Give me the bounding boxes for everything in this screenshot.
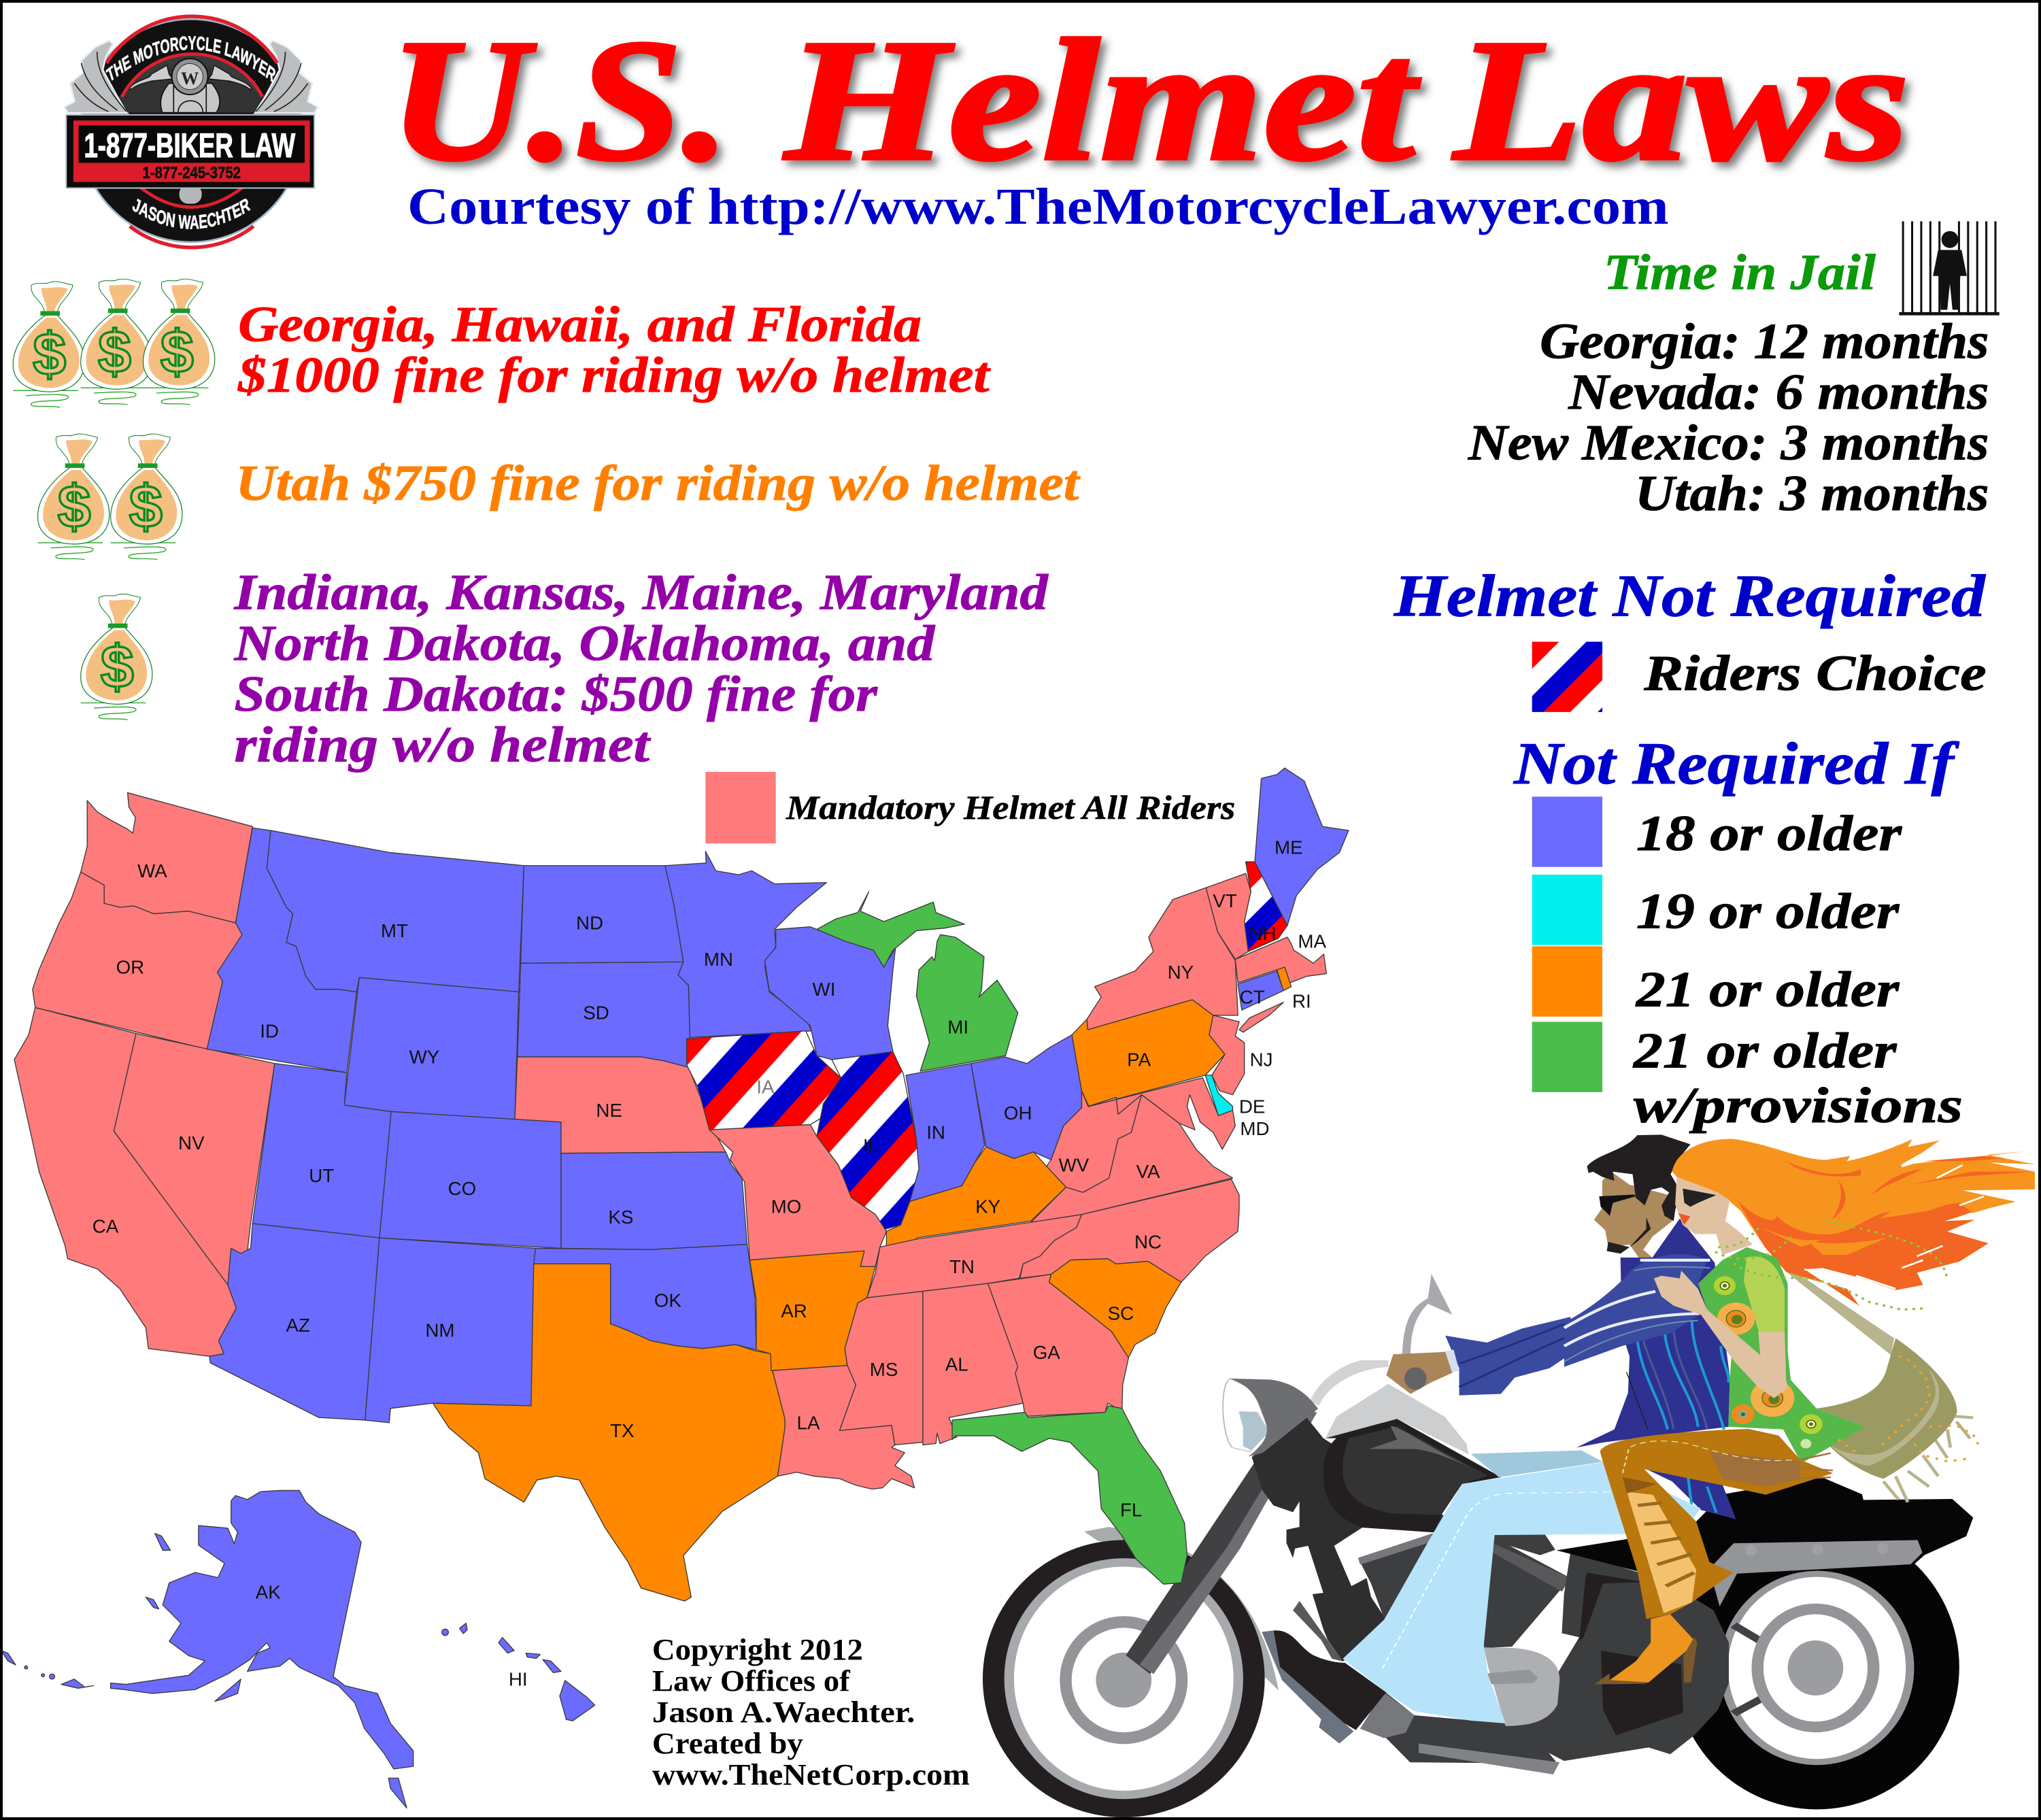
map state labels: WA — [137, 860, 167, 881]
map state labels: MA — [1298, 930, 1327, 951]
icon: one money bag: $ — [101, 633, 134, 701]
icon: one money bag — [81, 594, 152, 720]
map state labels: VA — [1136, 1161, 1160, 1182]
map state labels: CA — [92, 1215, 119, 1236]
map state labels: ND — [576, 913, 603, 934]
map state labels: NC — [1134, 1231, 1162, 1252]
legend: 21 or older with provisions: w/provisions — [1634, 1077, 1963, 1134]
map state labels: MD — [1240, 1118, 1270, 1139]
map state labels: MO — [771, 1196, 801, 1217]
jail time list — [1468, 313, 1989, 522]
copyright: Law Offices of — [652, 1664, 851, 1698]
legend: 19 or older — [1532, 875, 1900, 945]
copyright: Jason A.Waechter. — [652, 1696, 915, 1729]
fine text: $500: South Dakota: $500 fine for — [235, 666, 878, 722]
logo badge — [63, 14, 319, 249]
map state labels: OR — [116, 957, 144, 978]
jail time list: New Mexico: 3 months — [1468, 415, 1989, 471]
map state labels: AR — [781, 1300, 807, 1321]
map state labels: NH — [1249, 923, 1277, 944]
map state labels: SC — [1108, 1303, 1134, 1324]
map state labels: ME — [1275, 837, 1303, 858]
icon: three money bags: $ — [161, 318, 194, 385]
map state labels: CT — [1240, 987, 1265, 1008]
fine text: $1000: $1000 fine for riding w/o helmet — [237, 347, 991, 403]
map state labels: NY — [1168, 962, 1194, 983]
man's sleeve — [1564, 1254, 1707, 1367]
copyright: Created by — [652, 1727, 803, 1760]
map state labels: PA — [1127, 1049, 1151, 1070]
title: Laws — [1451, 3, 1910, 197]
logo bottom arc text: JASON WAECHTER — [132, 199, 251, 229]
map state labels: AZ — [286, 1315, 310, 1336]
copyright: www.TheNetCorp.com — [652, 1758, 970, 1791]
fine text: $750: Utah $750 fine for riding w/o helmet — [235, 455, 1081, 511]
map state labels: WV — [1059, 1155, 1090, 1176]
copyright — [652, 1633, 970, 1791]
man's head — [1594, 1172, 1672, 1258]
map state labels: OK — [654, 1290, 681, 1311]
map state labels: RI — [1292, 990, 1311, 1011]
man's jeans and boot — [1262, 1450, 1701, 1743]
map: Alaska — [1, 1490, 414, 1808]
map state labels: LA — [797, 1412, 820, 1433]
logo top arc text: THE MOTORCYCLE LAWYER — [105, 36, 275, 83]
map state labels: NM — [425, 1320, 454, 1341]
map state labels: TX — [610, 1420, 635, 1441]
couple upper bodies and hair — [1564, 1134, 2035, 1502]
map state labels: NE — [596, 1100, 622, 1121]
map state labels: WY — [409, 1047, 439, 1068]
fine text: $500: riding w/o helmet — [235, 717, 652, 773]
map state labels: VT — [1213, 890, 1237, 911]
fine text: $1000: Georgia, Hawaii, and Florida — [238, 296, 922, 352]
woman's face — [1675, 1177, 1753, 1255]
map state labels: ID — [260, 1020, 279, 1041]
jail time list: Georgia: 12 months — [1540, 313, 1989, 369]
fine text: $500: Indiana, Kansas, Maine, Maryland — [233, 564, 1049, 621]
icon: three money bags: $ — [98, 318, 131, 385]
beads — [1716, 1221, 1947, 1310]
jail time list: Nevada: 6 months — [1568, 364, 1989, 420]
map state labels: GA — [1033, 1342, 1060, 1363]
legend: mandatory helmet: Mandatory Helmet All Riders — [786, 789, 1235, 826]
map: Hawaii — [442, 1623, 595, 1721]
heading: helmet not required: Helmet Not Required — [1394, 563, 1987, 629]
legend: 18 or older — [1532, 796, 1902, 867]
map state labels: IA — [756, 1077, 775, 1098]
logo emblem letter: W — [181, 68, 199, 88]
map state labels: OH — [1004, 1102, 1032, 1124]
seat and rear fender — [1557, 1477, 1973, 1606]
woman's pants and boot — [1594, 1429, 1833, 1684]
map state labels: AL — [945, 1353, 968, 1375]
man's sleeve, hand — [1386, 1317, 1577, 1396]
logo phone name: 1-877-BIKER LAW — [84, 126, 295, 165]
icon: jail bars — [1899, 221, 2000, 315]
map state labels: UT — [309, 1165, 334, 1186]
icon: two money bags: $ — [129, 473, 163, 540]
map state labels: CO — [448, 1178, 476, 1199]
man's jacket torso — [1576, 1219, 1736, 1519]
map state labels: MS — [870, 1359, 898, 1380]
label: HI: HI — [509, 1668, 528, 1689]
illustration: couple on motorcycle — [983, 1134, 2035, 1817]
map state labels: TN — [949, 1256, 975, 1277]
subtitle: Courtesy of http://www.TheMotorcycleLawyer.com — [407, 178, 1669, 235]
fine text: $500: North Dakota, Oklahoma, and — [233, 615, 936, 671]
map state labels: MT — [381, 920, 408, 941]
legend: mandatory helmet — [705, 772, 1235, 843]
legend: 19 or older: 19 or older — [1636, 883, 1900, 940]
fine text: $500 — [233, 564, 1049, 773]
legend: riders choice: Riders Choice — [1643, 645, 1987, 701]
label: AK: AK — [256, 1581, 281, 1602]
wheels, fork and mirror — [983, 1274, 1959, 1817]
engine, tank and headlight — [1223, 1360, 1729, 1774]
heading: time in jail: Time in Jail — [1604, 244, 1876, 301]
legend: 18 or older: 18 or older — [1636, 805, 1902, 862]
map state labels: WI — [813, 979, 835, 1000]
heading: not required if: Not Required If — [1513, 731, 1959, 797]
woman's top — [1698, 1247, 1866, 1463]
map state labels: IL — [863, 1135, 879, 1156]
logo phone number: 1-877-245-3752 — [143, 164, 241, 182]
woman's hair — [1672, 1139, 2035, 1306]
icon: three money bags: $ — [33, 320, 66, 388]
map state labels: IN — [926, 1122, 945, 1143]
map state labels: KS — [608, 1207, 633, 1228]
bag — [1786, 1272, 1894, 1355]
jail time list: Utah: 3 months — [1635, 465, 1989, 522]
map state labels: KY — [975, 1196, 1000, 1217]
legend: 21 or older — [1532, 946, 1900, 1017]
legend: 21 or older: 21 or older — [1636, 961, 1900, 1017]
map state labels: NV — [178, 1132, 205, 1153]
map state labels: MN — [704, 949, 733, 970]
title — [389, 3, 1910, 197]
map state labels: NJ — [1250, 1049, 1273, 1070]
legend: 21 or older with provisions — [1532, 1022, 1963, 1134]
copyright: Copyright 2012 — [652, 1633, 863, 1666]
map state labels: DE — [1239, 1096, 1265, 1117]
title: U.S. — [389, 3, 730, 197]
icon: three money bags — [13, 279, 215, 407]
icon: two money bags — [38, 434, 182, 560]
fine text: $1000 — [237, 296, 991, 403]
map state labels: SD — [583, 1002, 609, 1024]
icon: two money bags: $ — [58, 473, 91, 540]
map state labels: FL — [1120, 1500, 1142, 1521]
woman's arm — [1654, 1270, 1788, 1398]
legend: 21 or older with provisions: 21 or older — [1633, 1022, 1897, 1079]
map state labels — [92, 837, 1327, 1521]
map state labels: MI — [947, 1017, 968, 1038]
title: Helmet — [781, 3, 1422, 197]
US map — [14, 768, 1349, 1601]
legend: riders choice — [1532, 642, 1987, 712]
